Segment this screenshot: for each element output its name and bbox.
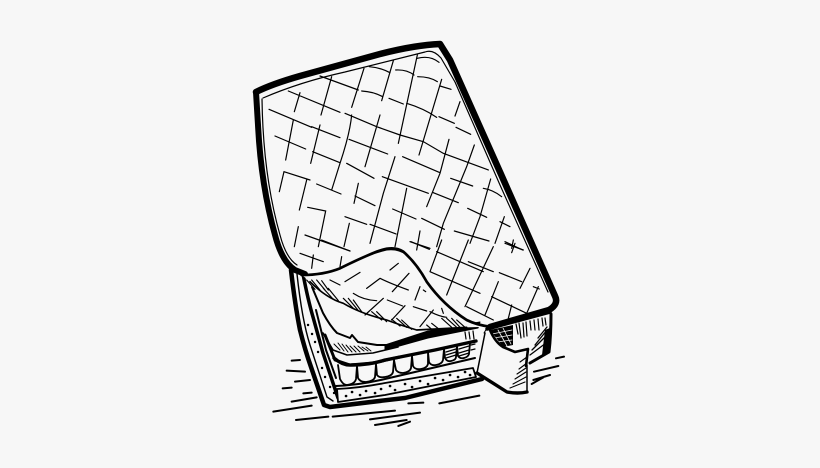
mattress top panel outline (256, 44, 556, 327)
quilted grid lower (300, 240, 539, 320)
right wall with hatching (487, 312, 551, 364)
inner thick side line (303, 274, 338, 398)
black wedge under flap (385, 322, 480, 350)
ground scribble strokes (273, 357, 564, 426)
mattress side body (291, 270, 490, 407)
peeled cover flap (302, 248, 490, 331)
side dots (308, 325, 334, 393)
folded corner tag (477, 328, 528, 393)
white foam layer (312, 287, 440, 345)
quilted grid upper (269, 55, 523, 253)
spring tooth band (336, 342, 476, 386)
hatched shadow below foam (323, 333, 398, 355)
thin side line (297, 274, 333, 401)
dotted base band (337, 368, 476, 402)
outer left edge and bottom (291, 270, 482, 407)
